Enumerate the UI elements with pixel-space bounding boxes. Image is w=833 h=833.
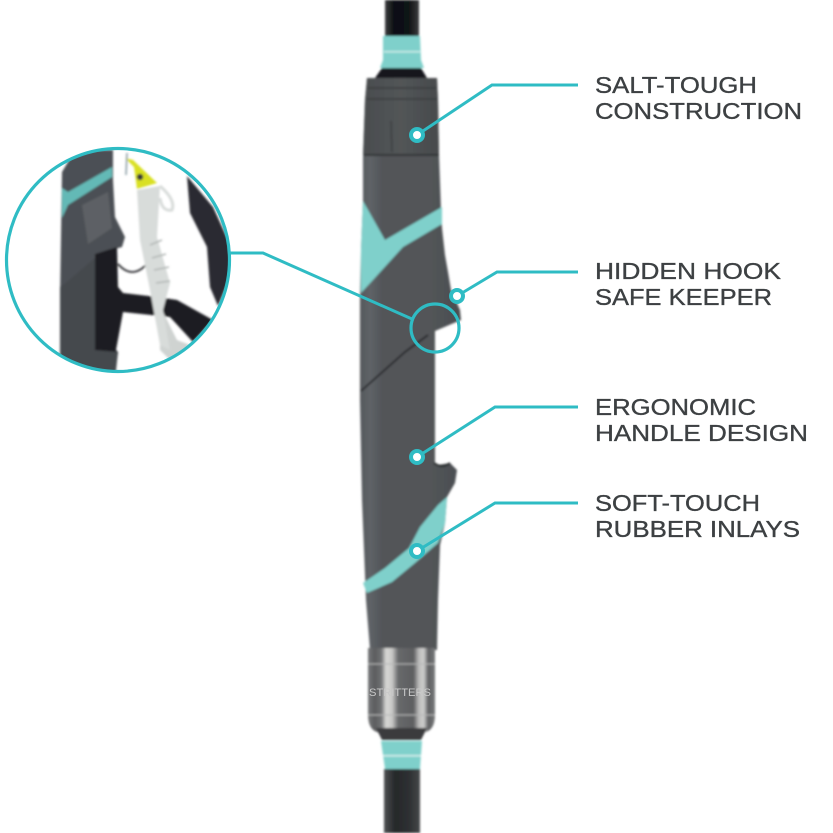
lower rod blank xyxy=(384,769,420,833)
leader line xyxy=(417,85,578,135)
lower teal wrap xyxy=(381,741,422,769)
lure body xyxy=(137,186,170,350)
lure head xyxy=(125,158,157,189)
ferrule brand text: STRITTERS xyxy=(369,687,431,699)
label text xyxy=(595,490,800,542)
cap seam xyxy=(364,154,439,156)
label text: ERGONOMIC xyxy=(595,394,756,420)
label text: SOFT-TOUCH xyxy=(595,490,760,516)
black collar xyxy=(375,68,427,78)
inset black holder xyxy=(93,246,212,354)
upper teal inlay xyxy=(361,201,442,293)
callout: soft-touch rubber inlays xyxy=(411,490,800,557)
inset right guard xyxy=(187,176,232,306)
grip seam slit xyxy=(361,335,428,391)
inset lower handle xyxy=(60,258,118,380)
marker dot xyxy=(411,451,423,463)
marker dot xyxy=(451,290,463,302)
ferrule engraving lines xyxy=(368,664,435,715)
label text: CONSTRUCTION xyxy=(595,98,802,124)
lower teal inlay xyxy=(363,497,447,593)
ferrule dark base xyxy=(376,728,427,740)
cap ring grooves xyxy=(367,88,437,99)
upper teal wrap xyxy=(380,36,424,68)
inset ring xyxy=(6,148,230,372)
label text: HANDLE DESIGN xyxy=(595,420,808,446)
upper wrap thread xyxy=(384,51,420,52)
upper rod blank xyxy=(385,0,419,38)
marker dot xyxy=(411,129,423,141)
callout: ergonomic handle design xyxy=(411,394,808,463)
label text xyxy=(595,258,781,310)
inset teal band xyxy=(62,167,112,218)
lower wrap thread xyxy=(383,755,421,756)
thumb notch shadow xyxy=(434,463,450,466)
leader line xyxy=(417,407,578,457)
callout: hidden hook safe keeper xyxy=(451,258,781,310)
fishing rod handle xyxy=(360,0,461,833)
callout: salt-tough construction xyxy=(411,72,802,141)
connector from inset to magnifier circle xyxy=(229,253,459,352)
marker dot xyxy=(411,545,423,557)
label text: HIDDEN HOOK xyxy=(595,258,781,284)
inset handle highlight xyxy=(82,192,112,244)
inset handle upper xyxy=(60,150,125,300)
lure fin xyxy=(160,186,173,210)
grip body xyxy=(360,78,461,650)
label text: SAFE KEEPER xyxy=(595,284,772,310)
label text xyxy=(595,72,802,124)
leader line xyxy=(457,272,578,296)
lure segments xyxy=(150,240,170,283)
zoomed inset: hook keeper with lure xyxy=(6,148,232,380)
metal ferrule xyxy=(368,648,435,733)
label text: SALT-TOUGH xyxy=(595,72,757,98)
leader line xyxy=(417,503,578,551)
inset hook xyxy=(118,264,147,272)
top cap segment xyxy=(363,78,439,155)
lure hook eye xyxy=(126,153,127,175)
label text xyxy=(595,394,808,446)
magnifier circle xyxy=(411,304,459,352)
lure tail xyxy=(159,312,189,358)
label text: RUBBER INLAYS xyxy=(595,516,800,542)
cap slot xyxy=(391,121,392,152)
lure eye xyxy=(137,174,143,180)
